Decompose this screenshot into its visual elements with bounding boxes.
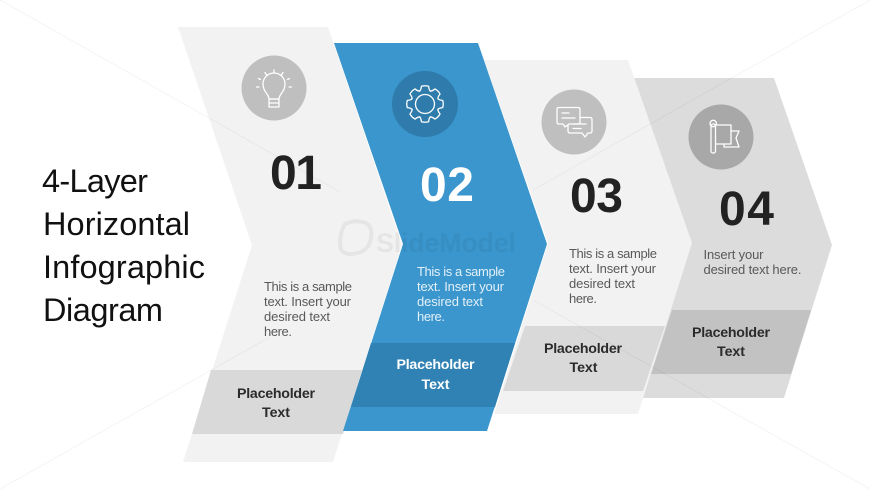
band 02 [351,343,515,407]
label 01: Text [262,405,290,421]
panel: step 02 [334,43,547,431]
chevron 04 [620,78,832,398]
chevron 03 [484,60,692,414]
title: Diagram [43,292,163,328]
icon: flag [710,120,739,153]
number 02: 02 [420,159,474,212]
body text 02: here. [417,309,445,324]
body text 04: Insert your [704,247,764,262]
band 04 [651,310,811,374]
label 02: Text [422,377,450,393]
label 02: Placeholder [396,357,475,373]
chevron 01 [178,27,402,462]
icon: light bulb [256,70,292,107]
watermark mark [340,221,371,254]
icon circle 03 [542,90,606,154]
number 03: 03 [570,170,623,223]
title: Horizontal [43,206,190,242]
title: Infographic [43,249,205,285]
icon circle 01 [242,56,306,120]
body text 04 [704,247,802,277]
label 02 [396,357,475,393]
body text 01: This is a sample [264,279,352,294]
body text 02: text. Insert your [417,279,505,294]
label 04: Text [717,344,745,360]
body text 02: desired text [417,294,483,309]
body text 03: This is a sample [569,246,657,261]
watermark logo [340,221,516,258]
label 01 [237,386,315,421]
label 03: Text [570,360,598,376]
body text 01: here. [264,324,292,339]
body text 01 [264,279,352,339]
body text 02 [417,264,505,324]
label 04: Placeholder [692,325,770,341]
body text 03 [569,246,657,306]
icon: gear [407,86,443,122]
title: 4-Layer [42,163,148,199]
body text 04: desired text here. [704,262,802,277]
label 03: Placeholder [544,341,622,357]
icon circle 02 [392,71,458,137]
body text 03: here. [569,291,597,306]
chevron 02 [334,43,547,431]
title [42,163,205,328]
panel: step 04 [620,78,832,398]
body text 02: This is a sample [417,264,505,279]
body text 03: desired text [569,276,635,291]
body text 03: text. Insert your [569,261,657,276]
label 04 [692,325,770,360]
watermark text: SlideModel [376,228,516,258]
label 03 [544,341,622,376]
body text 01: desired text [264,309,330,324]
icon circle 04 [688,104,754,170]
number 01: 01 [270,147,322,200]
body text 01: text. Insert your [264,294,352,309]
label 01: Placeholder [237,386,315,402]
band 03 [503,326,665,391]
band 01 [192,370,362,434]
panel: step 01 [178,27,402,462]
panel: step 03 [484,60,692,414]
number 04: 04 [719,183,774,236]
icon: chat bubbles [557,108,592,137]
